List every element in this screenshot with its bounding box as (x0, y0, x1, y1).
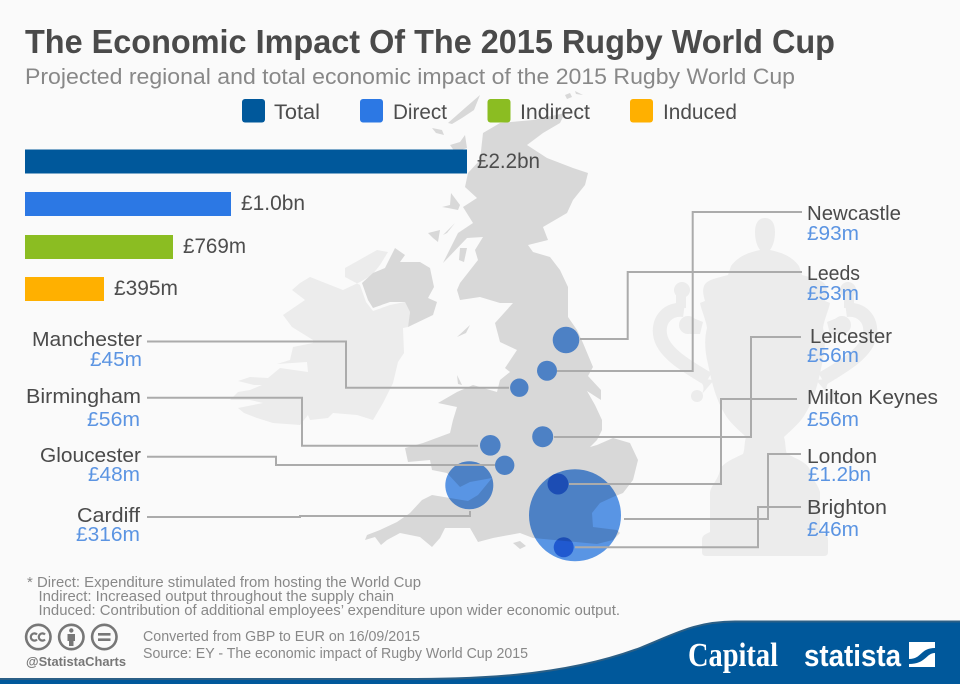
labels: right cities: £46m (807, 518, 859, 541)
labels: left cities: £56m (87, 408, 140, 431)
bar chart: impact totals: £395m (114, 277, 178, 300)
labels: left cities: Birmingham (26, 385, 141, 408)
legend: Total (274, 101, 320, 124)
Statista logo: statista (804, 638, 902, 673)
labels: right cities: £56m (807, 344, 859, 367)
labels: left cities: £45m (90, 348, 142, 371)
map: Great Britain and Northern Ireland (362, 91, 638, 549)
map: Ireland (230, 250, 410, 425)
title: The Economic Impact Of The 2015 Rugby World Cup (25, 23, 835, 60)
bar chart: impact totals: £1.0bn (241, 192, 305, 215)
labels: left cities: Manchester (32, 328, 142, 351)
labels: right cities: London (807, 445, 877, 468)
labels: right cities: £93m (807, 222, 859, 245)
labels: right cities: £53m (807, 282, 859, 305)
labels: left cities: £48m (88, 463, 140, 486)
legend: Direct (393, 101, 447, 124)
labels: right cities: Newcastle (807, 202, 901, 225)
footer band (0, 622, 960, 684)
labels: right cities: Brighton (807, 496, 887, 519)
trophy silhouette (660, 218, 870, 556)
Capital logo: Capital (688, 637, 778, 674)
bar chart: impact totals: £769m (183, 235, 246, 258)
legend (242, 99, 737, 124)
labels: left cities: £316m (76, 523, 140, 546)
handle: @StatistaCharts (26, 654, 126, 669)
source note: Source: EY - The economic impact of Rugby World Cup 2015 (143, 646, 528, 662)
licence icons (26, 625, 117, 649)
footnote: Indirect: Increased output throughout the supply chain (38, 589, 394, 605)
legend: Induced (663, 101, 737, 124)
labels: left cities: Cardiff (77, 504, 140, 527)
labels: right cities: £56m (807, 408, 859, 431)
labels: right cities: Leicester (810, 325, 892, 348)
footnote (27, 575, 620, 619)
labels: left cities: Gloucester (40, 444, 141, 467)
legend: Indirect (520, 101, 590, 124)
bar chart: impact totals: £2.2bn (477, 150, 540, 173)
footnote: * Direct: Expenditure stimulated from hosting the World Cup (27, 575, 421, 591)
source note: Converted from GBP to EUR on 16/09/2015 (143, 629, 420, 645)
bar chart: impact totals (25, 150, 540, 301)
labels: right cities: £1.2bn (808, 463, 871, 486)
labels: right cities: Milton Keynes (807, 386, 938, 409)
source note (143, 629, 528, 662)
city bubbles (445, 327, 621, 561)
labels: right cities: Leeds (807, 262, 860, 285)
labels: left cities (26, 328, 142, 546)
labels: right cities (807, 202, 938, 541)
subtitle: Projected regional and total economic impact of the 2015 Rugby World Cup (25, 64, 795, 89)
footnote: Induced: Contribution of additional employees’ expenditure upon wider economic output. (38, 603, 620, 619)
leader lines (147, 212, 802, 547)
